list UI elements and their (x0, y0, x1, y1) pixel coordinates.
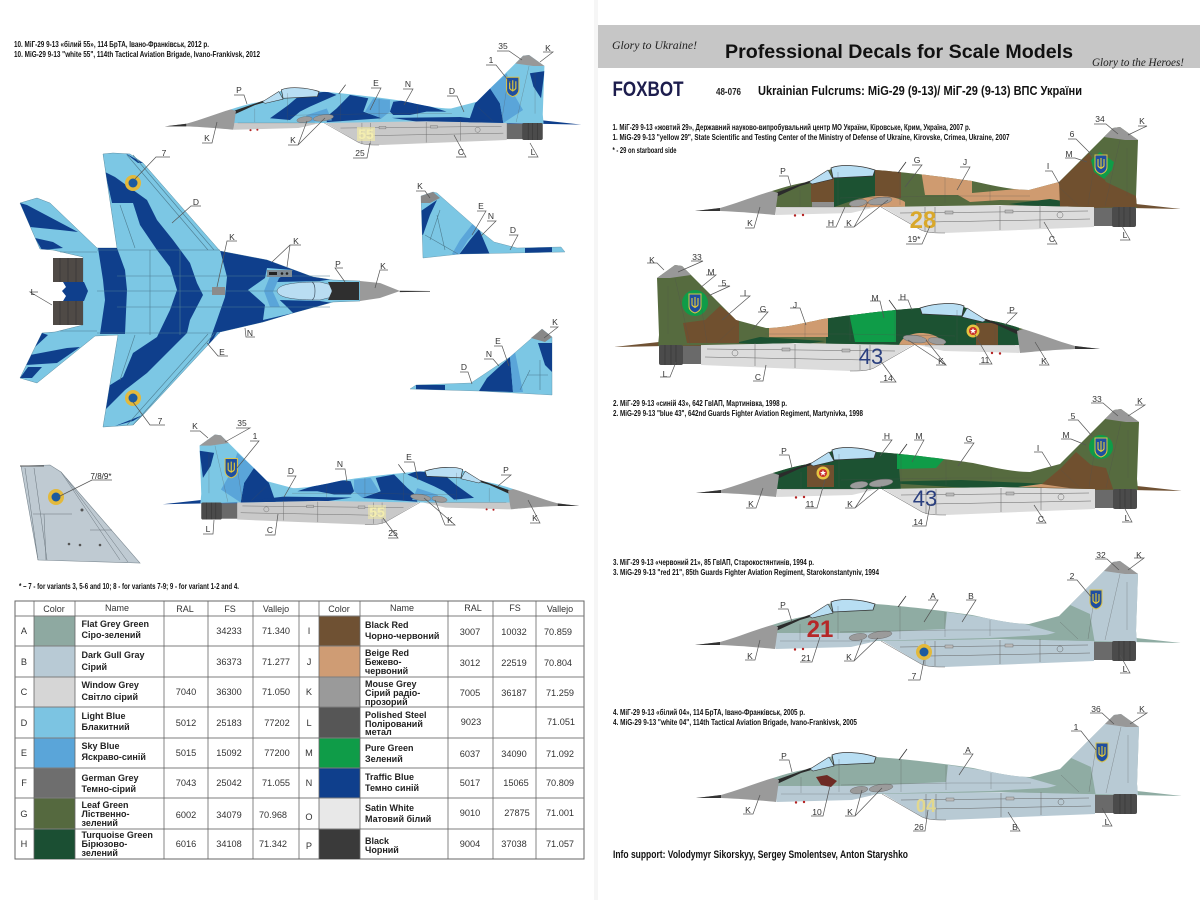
callouts: aircraft 5: P (781, 751, 787, 761)
table headers: FS (224, 604, 236, 614)
callouts: aircraft 1: K (846, 218, 852, 228)
callouts: aircraft 2: 11 (981, 355, 990, 365)
callouts: aircraft 4: K (747, 651, 753, 661)
table headers: Vallejo (263, 604, 289, 614)
callouts: aircraft 5: K (745, 805, 751, 815)
callouts: aircraft 1: K (1139, 116, 1145, 126)
callouts: fin lower: E (495, 336, 501, 346)
aircraft 4: red 21 (695, 554, 1181, 667)
callouts: aircraft 10 top (202, 41, 553, 158)
codes left: 77202 (264, 718, 290, 728)
callouts: aircraft 1: P (780, 166, 786, 176)
codes right: 71.001 (546, 808, 574, 818)
callouts: aircraft 10 bottom: 1 (253, 431, 258, 441)
colour names right: Beige Red (365, 648, 409, 658)
fin and wing fragment upper (418, 192, 565, 258)
caption: aircraft 5 (613, 708, 857, 727)
codes left: 77200 (264, 748, 290, 758)
callouts: aircraft 2 (647, 252, 1049, 383)
callouts: aircraft 2: K (649, 255, 655, 265)
colour names right: Бежево- (365, 657, 402, 667)
callouts: aircraft 3: P (781, 446, 787, 456)
row letters: D (21, 718, 28, 728)
codes right: 36187 (501, 688, 527, 698)
row letters: J (307, 657, 311, 667)
colour names left: Window Grey (82, 680, 139, 690)
callouts: plan view: 7 (158, 416, 163, 426)
callouts: aircraft 4: P (780, 600, 786, 610)
callouts: aircraft 3: M (1062, 430, 1070, 440)
callouts: aircraft 4: 32 (1096, 550, 1106, 560)
callouts: aircraft 1: 19* (908, 234, 921, 244)
callouts: aircraft 2: K (938, 356, 944, 366)
colour names left: зелений (82, 848, 118, 858)
callouts: aircraft 10 top: N (405, 79, 411, 89)
callouts: aircraft 5 (743, 704, 1147, 832)
callouts: aircraft 4: K (846, 652, 852, 662)
callouts: aircraft 3 (746, 394, 1145, 527)
callouts: plan view: L (31, 287, 36, 297)
codes left: 70.968 (259, 810, 287, 820)
callouts: aircraft 2: M (707, 267, 715, 277)
callouts: aircraft 10 bottom: 25 (388, 528, 398, 538)
colour names left: Flat Grey Green (82, 619, 149, 629)
colour names left: Темно-сірий (82, 784, 136, 794)
table headers: Color (328, 604, 350, 614)
header banner (598, 25, 1200, 69)
codes left: 34108 (216, 839, 242, 849)
caption: aircraft 4: 3. МіГ-29 9-13 «червоний 21», 85 ГвІАП, Старокостянтинів, 1994 р. (613, 558, 814, 567)
colour names right: Зелений (365, 754, 403, 764)
decal number 28: 28 (910, 207, 936, 234)
caption: aircraft 3 (613, 399, 863, 418)
callouts: aircraft 2: 5 (722, 278, 727, 288)
callouts: fin upper: E (478, 201, 484, 211)
codes left: 25042 (216, 778, 242, 788)
caption: aircraft 1 (612, 123, 1010, 155)
callouts: aircraft 2: C (755, 372, 761, 382)
callouts: aircraft 10 bottom: 35 (237, 418, 247, 428)
colour names left: Leaf Green (82, 800, 129, 810)
table headers: Name (390, 603, 414, 613)
callouts: aircraft 3: M (915, 431, 923, 441)
table headers: Vallejo (547, 604, 573, 614)
callouts: aircraft 1: K (747, 218, 753, 228)
codes right: 3012 (460, 658, 480, 668)
callouts: aircraft 2: 33 (692, 252, 702, 262)
colour names right: Satin White (365, 803, 414, 813)
callouts: plan view: K (293, 236, 299, 246)
codes left: 7040 (176, 687, 196, 697)
callouts: fin lower: K (552, 317, 558, 327)
table headers: RAL (176, 604, 194, 614)
table headers: RAL (464, 603, 482, 613)
catalog number: 48-076 (716, 87, 741, 98)
sheet title: Ukrainian Fulcrums: MiG-29 (9-13)/ МіГ-29 (9-13) ВПС України (758, 83, 1082, 98)
row letters: L (306, 718, 312, 728)
callouts: aircraft 5: 26 (914, 822, 924, 832)
callouts: aircraft 10 bottom: K (447, 515, 453, 525)
callout: fin markings 7/8/9: 7/8/9* (91, 472, 111, 481)
caption: aircraft 1: 1. MiG-29 9-13 "yellow 29", State Scientific and Testing Center of the Ministry of Defense of Ukraine, Kirovske, Crimea, Ukraine, 2007 (612, 133, 1010, 142)
codes left: 15092 (216, 748, 242, 758)
codes right: 6037 (460, 749, 480, 759)
callouts: aircraft 2: J (793, 300, 797, 310)
callouts: aircraft 10 bottom: K (192, 421, 198, 431)
callouts: aircraft 1: C (1049, 234, 1055, 244)
callouts: aircraft 10 top: 25 (355, 148, 365, 158)
callouts: fin upper: D (510, 225, 516, 235)
caption: aircraft 10 (14, 40, 260, 59)
codes left: 34079 (216, 810, 242, 820)
callouts: aircraft 2: H (900, 292, 906, 302)
script slogan left: Glory to Ukraine! (612, 38, 697, 52)
colour names left (82, 619, 153, 858)
codes right: 22519 (501, 658, 527, 668)
codes right: 71.259 (546, 688, 574, 698)
codes left: 71.050 (262, 687, 290, 697)
row letters: A (21, 626, 28, 636)
callouts: aircraft 2: G (760, 304, 766, 314)
codes right: 27875 (504, 808, 530, 818)
aircraft 3: blue 43, facing left (696, 402, 1182, 515)
colour names right: Mouse Grey (365, 679, 417, 689)
callouts: aircraft 10 top: E (373, 78, 379, 88)
row letters: H (21, 839, 27, 849)
row letters: K (306, 687, 313, 697)
callouts: aircraft 3: G (966, 434, 972, 444)
decal number 21: 21 (807, 616, 833, 643)
caption: aircraft 3: 2. МіГ-29 9-13 «синій 43», 642 ГвІАП, Мартинівка, 1998 р. (613, 399, 787, 408)
row letters: M (305, 748, 313, 758)
callouts: plan view: 7 (162, 148, 167, 158)
callouts: aircraft 1: 6 (1070, 129, 1075, 139)
callout: fin markings 7/8/9 (58, 472, 112, 497)
swatches (34, 616, 360, 859)
colour names left: German Grey (82, 773, 139, 783)
decal number 43 middle: 43 (913, 486, 937, 511)
codes left: 71.277 (262, 657, 290, 667)
row letters: C (21, 687, 28, 697)
callouts: aircraft 4: A (930, 591, 936, 601)
callouts: fin lower (460, 317, 558, 384)
codes right: 70.859 (544, 627, 572, 637)
callouts: aircraft 2: M (871, 293, 879, 303)
callouts: aircraft 1: J (963, 157, 967, 167)
callouts: aircraft 3: I (1037, 443, 1039, 453)
decal number 43 top: 43 (859, 344, 883, 369)
codes right: 37038 (501, 839, 527, 849)
codes right: 9023 (461, 717, 481, 727)
logo: FOXBOT: FOXBOT (612, 78, 684, 101)
callouts: aircraft 10 bottom: C (267, 525, 273, 535)
row letters: O (305, 812, 313, 822)
codes left: 34233 (216, 626, 242, 636)
callouts: aircraft 10 top: K (290, 135, 296, 145)
callouts: aircraft 4: 7 (912, 671, 917, 681)
callouts: aircraft 10 bottom: E (406, 452, 412, 462)
codes right: 15065 (503, 778, 529, 788)
callouts: aircraft 3: K (748, 499, 754, 509)
callouts: aircraft 1: M (1065, 149, 1073, 159)
colour names left: Бірюзово- (82, 839, 127, 849)
callouts: aircraft 1: H (828, 218, 834, 228)
codes left: 71.055 (262, 778, 290, 788)
callouts: aircraft 10 bottom: P (503, 465, 509, 475)
callouts: aircraft 3: H (884, 431, 890, 441)
callouts: aircraft 5: B (1012, 822, 1018, 832)
colour names right: Матовий білий (365, 814, 431, 824)
row letters: P (306, 841, 312, 851)
callouts: aircraft 10 top: D (449, 86, 455, 96)
row letters: B (21, 657, 27, 667)
codes right: 71.051 (547, 717, 575, 727)
panel: page divider (594, 0, 598, 900)
callouts: aircraft 1: L (1123, 230, 1128, 240)
callouts: plan view: D (193, 197, 199, 207)
colour names left: Turquoise Green (82, 830, 153, 840)
row letters: F (21, 778, 27, 788)
callouts: aircraft 3: K (1137, 396, 1143, 406)
colour table (15, 601, 584, 859)
callouts: aircraft 3: 33 (1092, 394, 1102, 404)
colour names right: Сірий радіо- (365, 688, 420, 698)
decal number 55 bottom: 55 (369, 504, 385, 520)
callouts: aircraft 10 bottom: N (337, 459, 343, 469)
callouts: aircraft 4: 2 (1070, 571, 1075, 581)
codes right: 3007 (460, 627, 480, 637)
table headers: FS (509, 603, 521, 613)
roundel: aircraft 4 intake (916, 644, 932, 660)
callouts: aircraft 3: 5 (1071, 411, 1076, 421)
caption: aircraft 10: 10. МіГ-29 9-13 «білий 55», 114 БрТА, Івано-Франківськ, 2012 р. (14, 40, 209, 49)
callouts: aircraft 2: 14 (883, 373, 893, 383)
main title: Professional Decals for Scale Models (725, 42, 1073, 63)
callouts: aircraft 5: A (965, 745, 971, 755)
callouts: aircraft 1: G (914, 155, 920, 165)
callouts: aircraft 10 top: P (236, 85, 242, 95)
codes right: 5017 (460, 778, 480, 788)
aircraft 10: top-down plan view (20, 153, 430, 427)
aircraft 1: yellow 28 (695, 120, 1181, 233)
codes right: 7005 (460, 688, 480, 698)
aircraft 5: white 04 (696, 707, 1182, 820)
callouts: aircraft 10 bottom: L (206, 524, 211, 534)
callouts: fin upper (416, 181, 518, 250)
fin study with roundel (20, 465, 140, 563)
colour names right: прозорий (365, 697, 408, 707)
callouts: aircraft 1 (745, 114, 1147, 244)
colour names left: Ліственно- (82, 809, 130, 819)
callouts: aircraft 2: I (744, 288, 746, 298)
callouts: aircraft 5: 1 (1074, 722, 1079, 732)
table headers: Name (105, 603, 129, 613)
codes left: 25183 (216, 718, 242, 728)
colour names right (365, 620, 439, 855)
callouts: aircraft 10 top: 35 (498, 41, 508, 51)
callouts: aircraft 3: 11 (806, 499, 815, 509)
callouts: aircraft 10 top: C (458, 147, 464, 157)
caption: aircraft 1: 1. МіГ-29 9-13 «жовтий 29», Державний науково-випробувальний центр МО України, Кіровське, Крим, Україна, 2007 р. (612, 123, 970, 132)
row letters (20, 626, 313, 851)
caption: aircraft 10: 10. MiG-29 9-13 "white 55", 114th Tactical Aviation Brigade, Ivano-Frankivsk, 2012 (14, 50, 260, 59)
script slogan right: Glory to the Heroes! (1092, 55, 1184, 69)
colour names right: Полірований (365, 719, 423, 729)
footnote: * – 7 - for variants 3, 5-6 and 10; 8 - for variants 7-9; 9 - for variant 1-2 and 4. (19, 582, 239, 591)
callouts: aircraft 10 top: K (204, 133, 210, 143)
aircraft 10: port side profile (165, 49, 581, 145)
callouts: aircraft 10 top: L (531, 147, 536, 157)
colour names right: Black Red (365, 620, 409, 630)
colour names left: Яскраво-синій (82, 752, 146, 762)
table headers: Color (43, 604, 65, 614)
callouts: aircraft 4 (745, 550, 1144, 681)
colour names left: Sky Blue (82, 741, 120, 751)
colour names right: Чорно-червоний (365, 631, 439, 641)
colour names right: Pure Green (365, 743, 414, 753)
aircraft 10: starboard side profile (163, 429, 579, 525)
callouts: plan view: K (229, 232, 235, 242)
codes left: 71.342 (259, 839, 287, 849)
colour names left: Сірий (82, 662, 107, 672)
colour names right: Чорний (365, 845, 399, 855)
callouts: aircraft 1: 34 (1095, 114, 1105, 124)
fin and wing fragment lower (410, 329, 553, 395)
callouts: fin lower: D (461, 362, 467, 372)
caption: aircraft 4 (613, 558, 879, 577)
callouts: fin lower: N (486, 349, 492, 359)
colour names right: Black (365, 836, 390, 846)
callouts: fin upper: K (417, 181, 423, 191)
callouts: aircraft 4: 21 (801, 653, 811, 663)
colour names left: Light Blue (82, 711, 126, 721)
table headers (43, 603, 573, 614)
colour names right: метал (365, 727, 392, 737)
codes right: 71.092 (546, 749, 574, 759)
colour names left: Сіро-зелений (82, 630, 141, 640)
callouts: aircraft 3: K (847, 499, 853, 509)
aircraft 2: blue 43, facing right (614, 258, 1100, 371)
callouts: aircraft 5: K (847, 807, 853, 817)
codes right: 70.809 (546, 778, 574, 788)
colour names left: Dark Gull Gray (82, 650, 145, 660)
row letters: G (20, 809, 28, 819)
info support credit: Info support: Volodymyr Sikorskyy, Sergey Smolentsev, Anton Staryshko (613, 849, 908, 861)
callouts: aircraft 3: C (1038, 514, 1044, 524)
callouts: aircraft 10 bottom: K (532, 513, 538, 523)
colour names right: Polished Steel (365, 710, 427, 720)
callouts: aircraft 5: 36 (1091, 704, 1101, 714)
callouts: aircraft 10 bottom (190, 418, 540, 538)
codes left: 36300 (216, 687, 242, 697)
callouts: aircraft 3: 14 (913, 517, 923, 527)
row letters: I (308, 626, 310, 636)
colour names right: Traffic Blue (365, 772, 414, 782)
callouts: plan view: N (247, 328, 253, 338)
decal number 04: 04 (916, 796, 936, 816)
callouts: aircraft 5: K (1139, 704, 1145, 714)
callouts: aircraft 1: I (1047, 161, 1049, 171)
codes left: 36373 (216, 657, 242, 667)
codes right: 10032 (501, 627, 527, 637)
codes right: 9004 (460, 839, 480, 849)
codes left: 7043 (176, 778, 196, 788)
row letters: N (306, 778, 312, 788)
callouts: aircraft 2: L (663, 369, 668, 379)
colour names right: червоний (365, 666, 408, 676)
callouts: aircraft 5: 10 (812, 807, 822, 817)
callouts: aircraft 3: L (1125, 513, 1130, 523)
callouts: aircraft 4: L (1123, 664, 1128, 674)
codes left (176, 626, 290, 849)
callouts: aircraft 10 bottom: D (288, 466, 294, 476)
callouts: aircraft 10 top: K (545, 43, 551, 53)
codes right (460, 627, 575, 849)
codes right: 34090 (501, 749, 527, 759)
decal number 55 top: 55 (358, 126, 374, 142)
colour names left: Блакитний (82, 722, 130, 732)
callouts: aircraft 4: K (1136, 550, 1142, 560)
colour names left: Світло сірий (82, 692, 138, 702)
colour names right: Темно синій (365, 783, 419, 793)
codes left: 6016 (176, 839, 196, 849)
callouts: aircraft 2: P (1009, 305, 1015, 315)
callouts: aircraft 5: L (1105, 817, 1110, 827)
codes left: 5015 (176, 748, 196, 758)
callouts: plan view (30, 148, 388, 426)
caption: aircraft 5: 4. MiG-29 9-13 "white 04", 114th Tactical Aviation Brigade, Ivano-Frankivsk, 2005 (613, 718, 857, 727)
codes right: 9010 (460, 808, 480, 818)
caption: aircraft 4: 3. MiG-29 9-13 "red 21", 85th Guards Fighter Aviation Regiment, Starokonstantyniv, 1994 (613, 568, 879, 577)
callouts: plan view: E (219, 347, 225, 357)
callouts: plan view: K (380, 261, 386, 271)
caption: aircraft 1: * - 29 on starboard side (612, 146, 677, 155)
codes right: 70.804 (544, 658, 572, 668)
callouts: aircraft 2: K (1041, 356, 1047, 366)
codes left: 5012 (176, 718, 196, 728)
row letters: E (21, 748, 27, 758)
codes right: 71.057 (546, 839, 574, 849)
callouts: fin upper: N (488, 211, 494, 221)
codes left: 71.340 (262, 626, 290, 636)
callouts: plan view: P (335, 259, 341, 269)
colour names left: зелений (82, 818, 118, 828)
codes left: 6002 (176, 810, 196, 820)
caption: aircraft 5: 4. МіГ-29 9-13 «білий 04», 114 БрТА, Івано-Франківськ, 2005 р. (613, 708, 805, 717)
callouts: aircraft 4: B (968, 591, 974, 601)
callouts: aircraft 10 top: 1 (489, 55, 494, 65)
caption: aircraft 3: 2. MiG-29 9-13 "blue 43", 642nd Guards Fighter Aviation Regiment, Martynivka, 1998 (613, 409, 863, 418)
